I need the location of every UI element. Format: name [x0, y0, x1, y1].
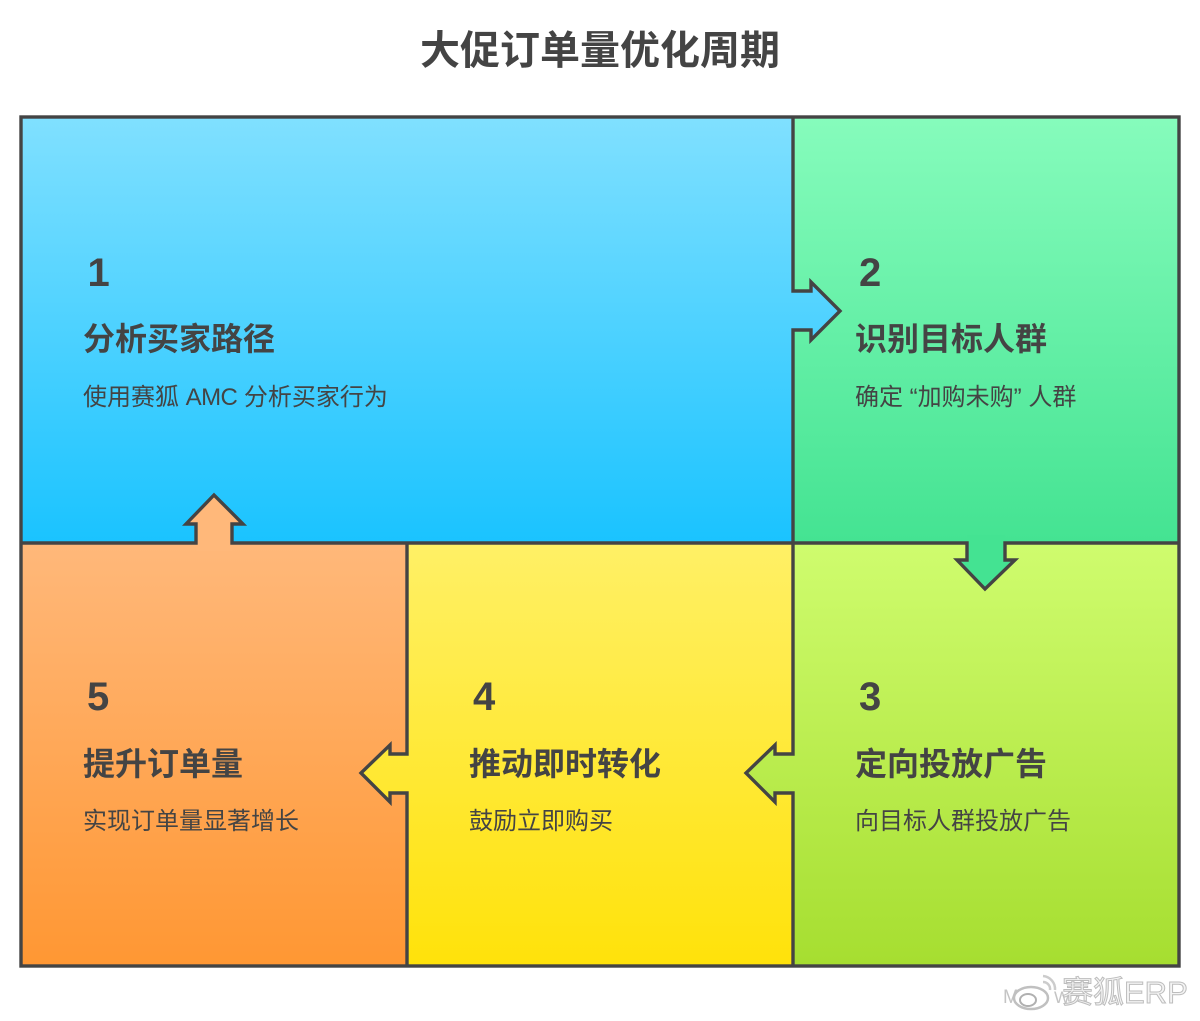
step 3 text: 向目标人群投放广告	[855, 808, 1071, 835]
step 4 text: 4	[473, 675, 496, 719]
step 4 text	[469, 675, 661, 835]
step 4 text: 推动即时转化	[469, 746, 661, 782]
step 2 text: 确定 “加购未购” 人群	[855, 384, 1076, 411]
step 1 text: 使用赛狐 AMC 分析买家行为	[83, 384, 388, 411]
watermark	[1003, 975, 1188, 1010]
panel: step 1 background	[21, 117, 793, 543]
title: 大促订单量优化周期	[420, 29, 780, 73]
step 3 text	[855, 675, 1071, 835]
watermark: M	[1003, 987, 1019, 1008]
step 5 text: 5	[87, 675, 109, 719]
arrow: step 5 to step 1	[186, 495, 243, 551]
step 1 text	[83, 251, 388, 411]
step 2 text	[855, 251, 1076, 411]
step 2 text: 2	[859, 251, 881, 295]
arrow: step 3 to step 4	[746, 745, 801, 802]
step 5 text: 提升订单量	[83, 746, 243, 782]
step 1 text: 1	[88, 251, 110, 295]
step 1 text: 分析买家路径	[83, 321, 275, 357]
panel: step 2 background	[793, 117, 1179, 543]
step 4 text: 鼓励立即购买	[469, 808, 613, 835]
arrow: step 4 to step 5	[361, 745, 415, 802]
arrow: step 2 to step 3	[957, 535, 1015, 589]
step 2 text: 识别目标人群	[855, 321, 1047, 357]
step 3 text: 定向投放广告	[855, 746, 1047, 782]
step 5 text	[83, 675, 299, 835]
panel: step 4 background	[407, 543, 793, 966]
step 5 text: 实现订单量显著增长	[83, 808, 299, 835]
step 3 text: 3	[859, 675, 881, 719]
panel: step 5 background	[21, 543, 407, 966]
arrow: step 1 to step 2	[785, 282, 840, 340]
panel: step 3 background	[793, 543, 1179, 966]
watermark: 赛狐ERP	[1062, 975, 1188, 1010]
watermark: W	[1054, 988, 1070, 1007]
